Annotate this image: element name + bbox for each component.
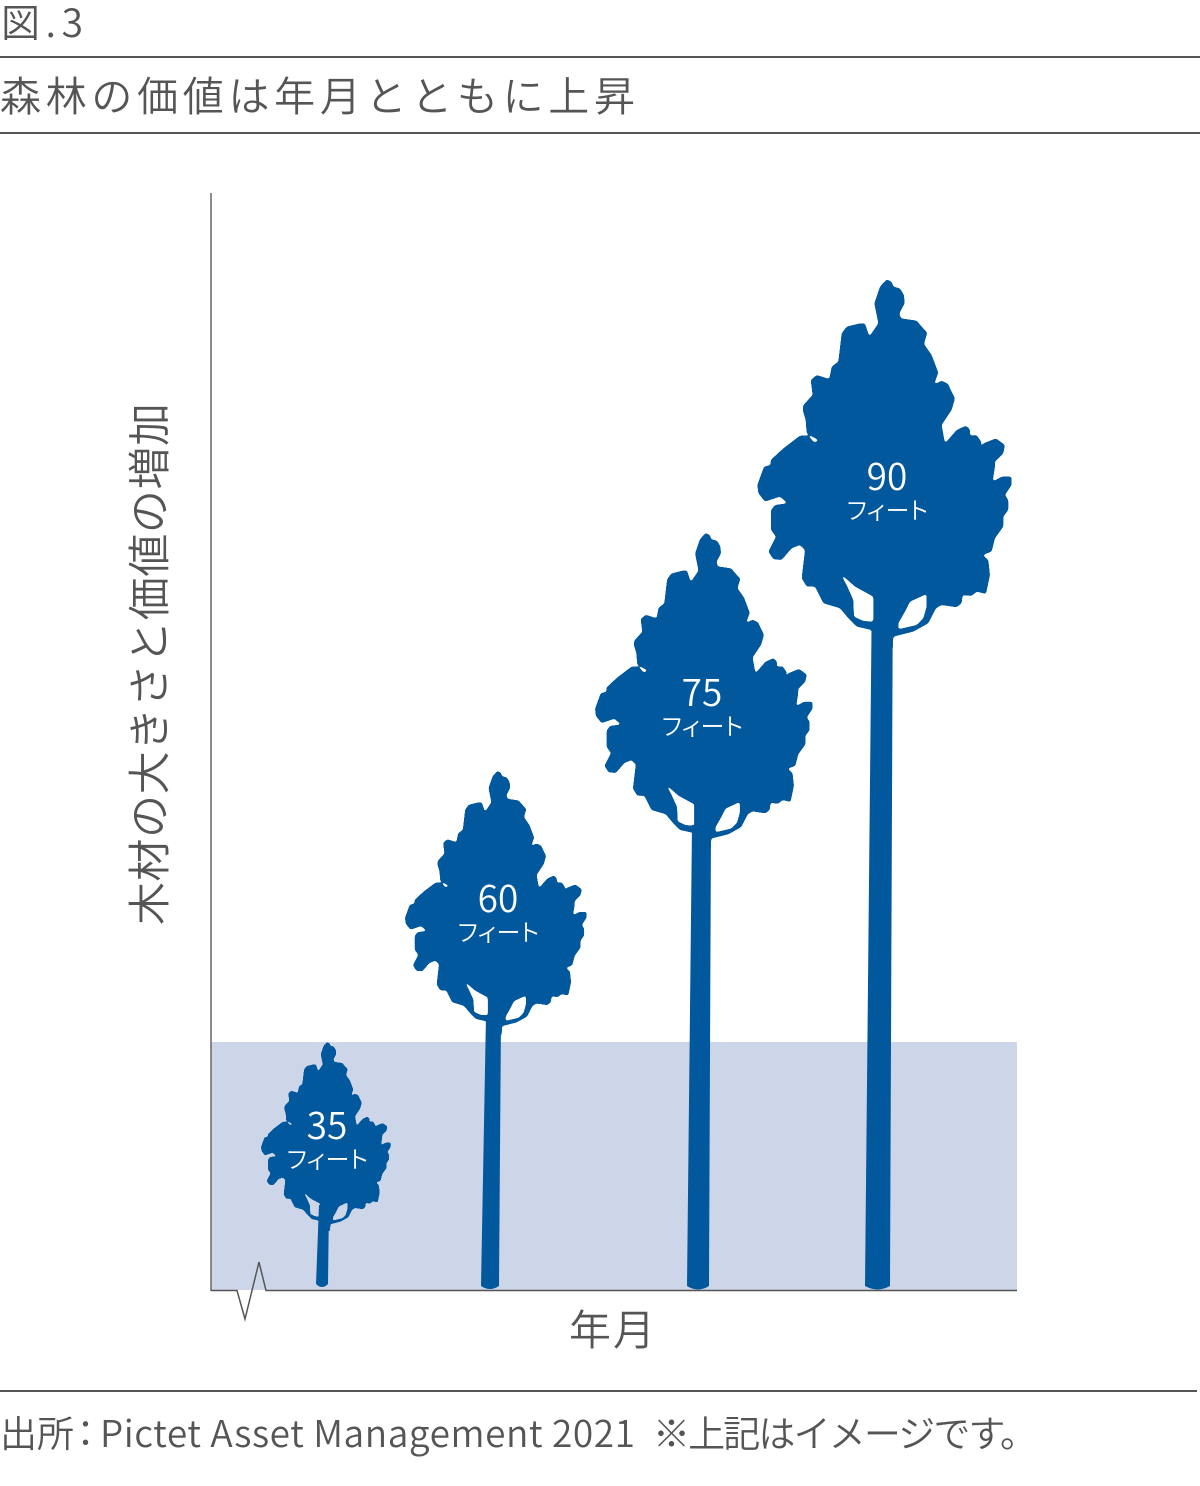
tree: 35 feet: 35 <box>307 1096 347 1150</box>
tree: 90 feet: 90 <box>867 447 907 501</box>
tree: 35 feet <box>261 1042 391 1287</box>
tree: 60 feet: フィート <box>456 913 541 948</box>
tree: 35 feet: フィート <box>285 1140 370 1175</box>
source note: 出所 <box>0 1404 74 1458</box>
y axis label: 木材の大きさと価値の増加 <box>116 403 178 925</box>
x axis label: 年月 <box>569 1297 655 1358</box>
source note: ※上記はイメージです。 <box>653 1404 1037 1458</box>
tree: 60 feet <box>405 771 587 1289</box>
tree: 75 feet: フィート <box>660 707 745 742</box>
tree: 75 feet <box>595 533 812 1290</box>
highlighted band <box>211 1042 1017 1290</box>
source note: Pictet Asset Management 2021 <box>100 1404 635 1458</box>
source note: ： <box>67 1404 104 1458</box>
tree: 60 feet: 60 <box>478 869 518 923</box>
title: 森林の価値は年月とともに上昇 <box>0 63 635 123</box>
chart: tree growth <box>116 193 1017 1358</box>
source note <box>0 1404 1037 1458</box>
tree: 75 feet: 75 <box>682 663 722 717</box>
y axis <box>210 193 212 1291</box>
x axis with break <box>211 1262 1017 1319</box>
tree: 90 feet: フィート <box>845 491 930 526</box>
tree: 90 feet <box>757 279 1012 1290</box>
